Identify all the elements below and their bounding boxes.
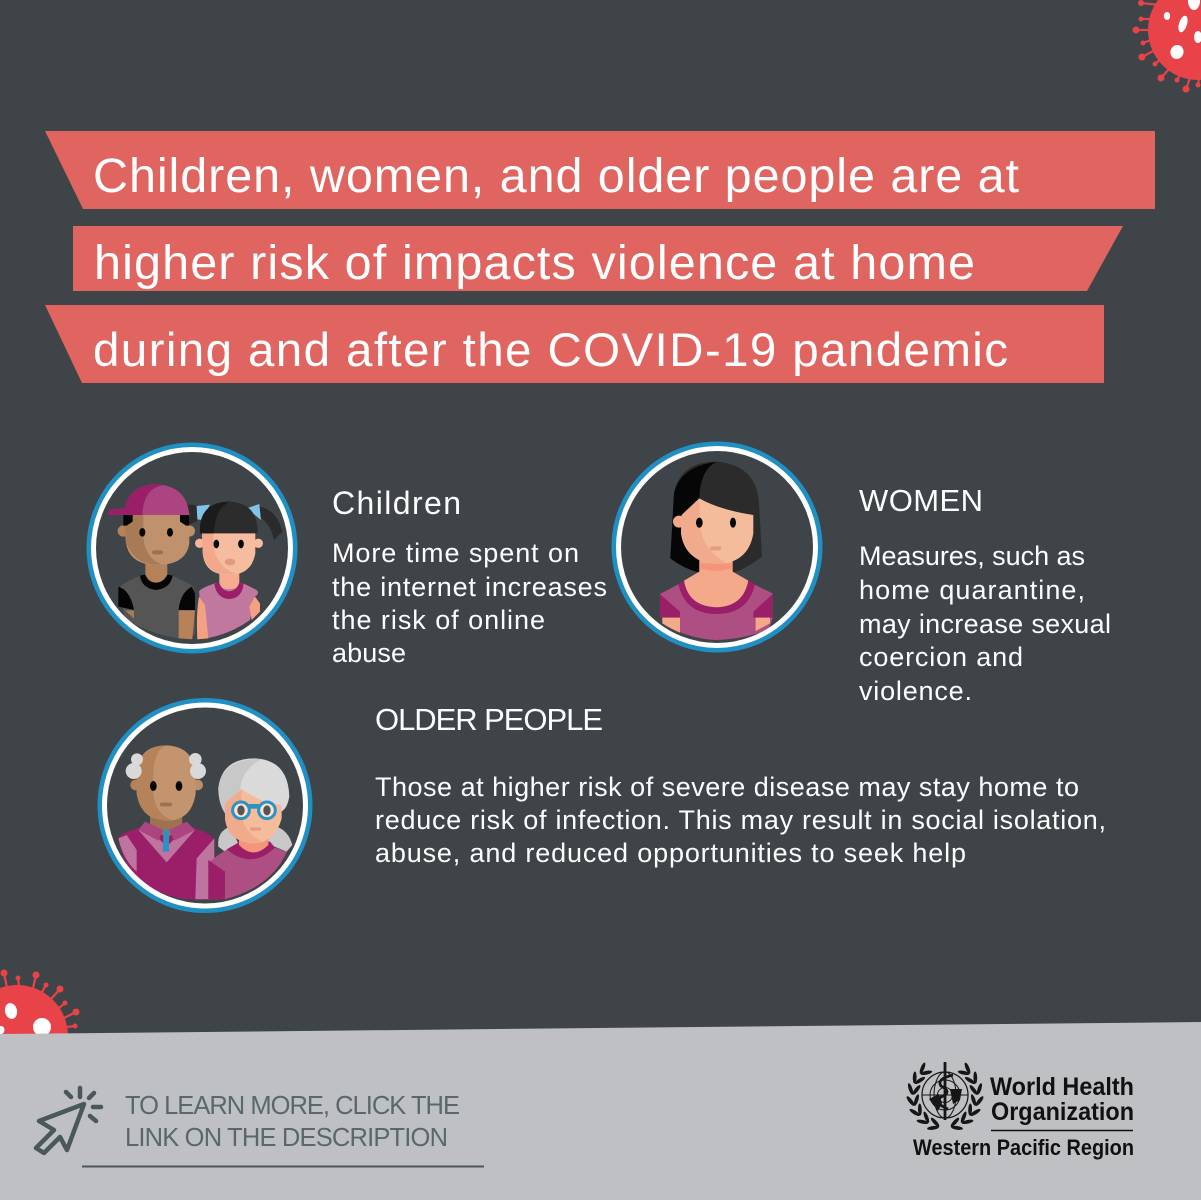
body: children: the internet increases <box>332 572 607 602</box>
text: women <box>859 483 1111 706</box>
boy body <box>118 576 195 639</box>
WHO wordmark: Western Pacific Region <box>913 1135 1134 1160</box>
body: children: More time spent on <box>332 538 579 568</box>
body: children: the risk of online <box>332 605 545 635</box>
text: older people <box>375 702 1106 868</box>
body: women: coercion and <box>859 642 1023 672</box>
banner line 2: higher risk of impacts violence at home <box>94 236 975 290</box>
neck and chest <box>684 558 748 607</box>
icon: virus top right <box>1132 0 1201 92</box>
call to action text: LINK ON THE DESCRIPTION <box>125 1124 448 1152</box>
panel: heading banners <box>45 131 1155 383</box>
banner line 1 <box>45 131 1155 209</box>
WHO wordmark: Organization <box>991 1098 1134 1126</box>
body: women <box>859 541 1111 706</box>
logo: WHO Western Pacific Region <box>905 1061 1134 1160</box>
body: women: may increase sexual <box>859 609 1111 639</box>
body: children <box>332 538 607 668</box>
body: older people: Those at higher risk of severe disease may stay home to <box>375 772 1079 802</box>
text: children <box>332 485 607 668</box>
heading: women: WOMEN <box>859 483 983 518</box>
WHO wordmark: World Health <box>990 1073 1134 1101</box>
shirt <box>660 582 773 640</box>
icon: cursor click <box>36 1088 101 1153</box>
banner line 1: Children, women, and older people are at <box>93 149 1020 203</box>
body: women: violence. <box>859 676 972 706</box>
body: children: abuse <box>332 638 406 668</box>
woman body <box>208 847 287 899</box>
icon: virus bottom left <box>0 970 80 1087</box>
body: older people: reduce risk of infection. This may result in social isolation, <box>375 805 1106 835</box>
man sweater <box>118 827 214 899</box>
girl body <box>198 583 258 639</box>
girl pigtails <box>187 505 202 525</box>
banner line 2 <box>73 226 1123 291</box>
woman face <box>225 789 282 843</box>
boy ears, head <box>118 525 129 537</box>
man head <box>130 780 141 790</box>
icon: children portrait <box>89 445 295 651</box>
body: women: home quarantine, <box>859 575 1085 605</box>
body: older people: abuse, and reduced opportunities to seek help <box>375 838 966 868</box>
boy cap <box>107 484 189 515</box>
icon: older people portrait <box>100 700 310 910</box>
call to action underline <box>82 1166 484 1168</box>
heading: children: Children <box>332 485 461 521</box>
hair back <box>670 462 762 573</box>
banner line 3: during and after the COVID-19 pandemic <box>93 324 1008 377</box>
face <box>673 516 685 528</box>
girl head <box>195 539 204 548</box>
body: older people <box>375 772 1106 868</box>
heading: older people: OLDER PEOPLE <box>375 702 603 737</box>
call to action text <box>125 1092 460 1152</box>
WHO wordmark <box>913 1073 1134 1160</box>
icon: WHO emblem <box>905 1061 985 1134</box>
panel: footer band <box>0 1022 1201 1200</box>
banner line 3 <box>45 305 1104 383</box>
call to action text: TO LEARN MORE, CLICK THE <box>125 1092 460 1120</box>
icon: woman portrait <box>614 444 820 650</box>
body: women: Measures, such as <box>859 541 1085 571</box>
woman hair <box>218 827 238 852</box>
